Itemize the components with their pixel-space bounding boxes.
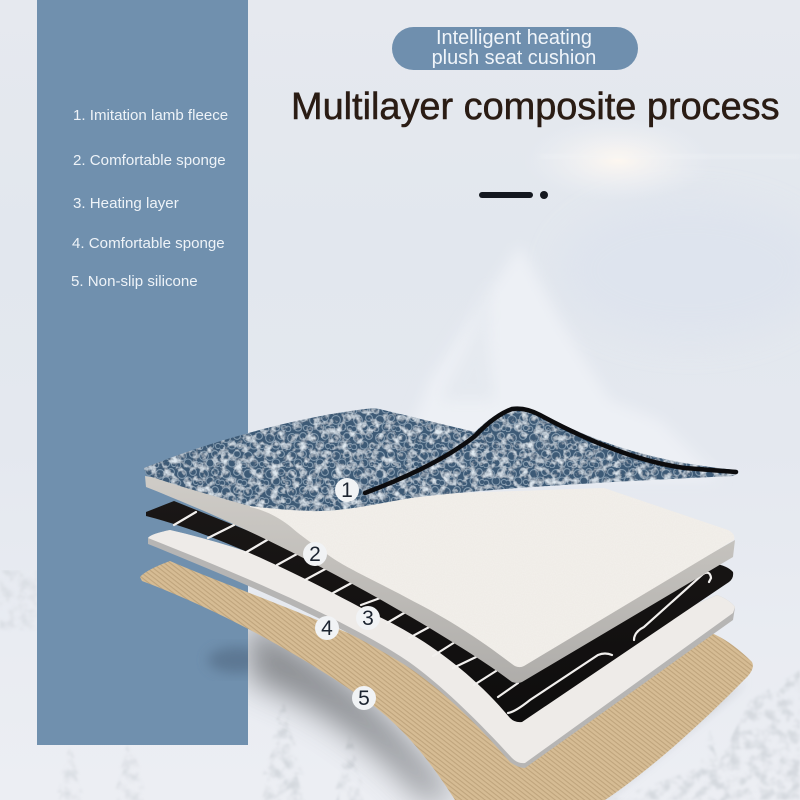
number marker 3 <box>356 606 380 630</box>
layer list item 5: 5. Non-slip silicone <box>71 273 198 290</box>
subtitle pill: plush seat cushion <box>432 47 596 69</box>
layer 2: comfortable sponge <box>145 476 735 683</box>
layer list item 1: 1. Imitation lamb fleece <box>73 107 228 124</box>
number marker 4 <box>315 616 339 640</box>
number marker 1: 1 <box>341 479 353 502</box>
layer list item 3: 3. Heating layer <box>73 195 179 212</box>
panel shadow patch <box>208 644 248 676</box>
layer list item 4: 4. Comfortable sponge <box>72 235 225 252</box>
layer 4: comfortable sponge <box>148 530 735 768</box>
layer list item 2: 2. Comfortable sponge <box>73 152 226 169</box>
title: Multilayer composite process <box>291 86 780 128</box>
number marker 2 <box>303 542 327 566</box>
decorative dash and dot <box>479 191 548 199</box>
number marker 5: 5 <box>358 687 370 710</box>
cushion cast shadow <box>248 620 455 800</box>
layer 3: heating layer <box>146 501 733 722</box>
panel: layer list <box>37 0 268 745</box>
frosted trees <box>0 570 800 800</box>
number marker 4: 4 <box>321 617 333 640</box>
layered cushion diagram <box>140 408 753 800</box>
fleece backing edge <box>365 409 736 493</box>
number marker 2: 2 <box>309 543 321 566</box>
layer 1: imitation lamb fleece <box>144 408 738 511</box>
number marker 5 <box>352 686 376 710</box>
subtitle pill: Intelligent heating <box>436 27 592 49</box>
number marker 1 <box>335 478 359 502</box>
number marker 3: 3 <box>362 607 374 630</box>
layer 5: non-slip silicone <box>140 561 753 800</box>
subtitle pill <box>392 27 638 70</box>
